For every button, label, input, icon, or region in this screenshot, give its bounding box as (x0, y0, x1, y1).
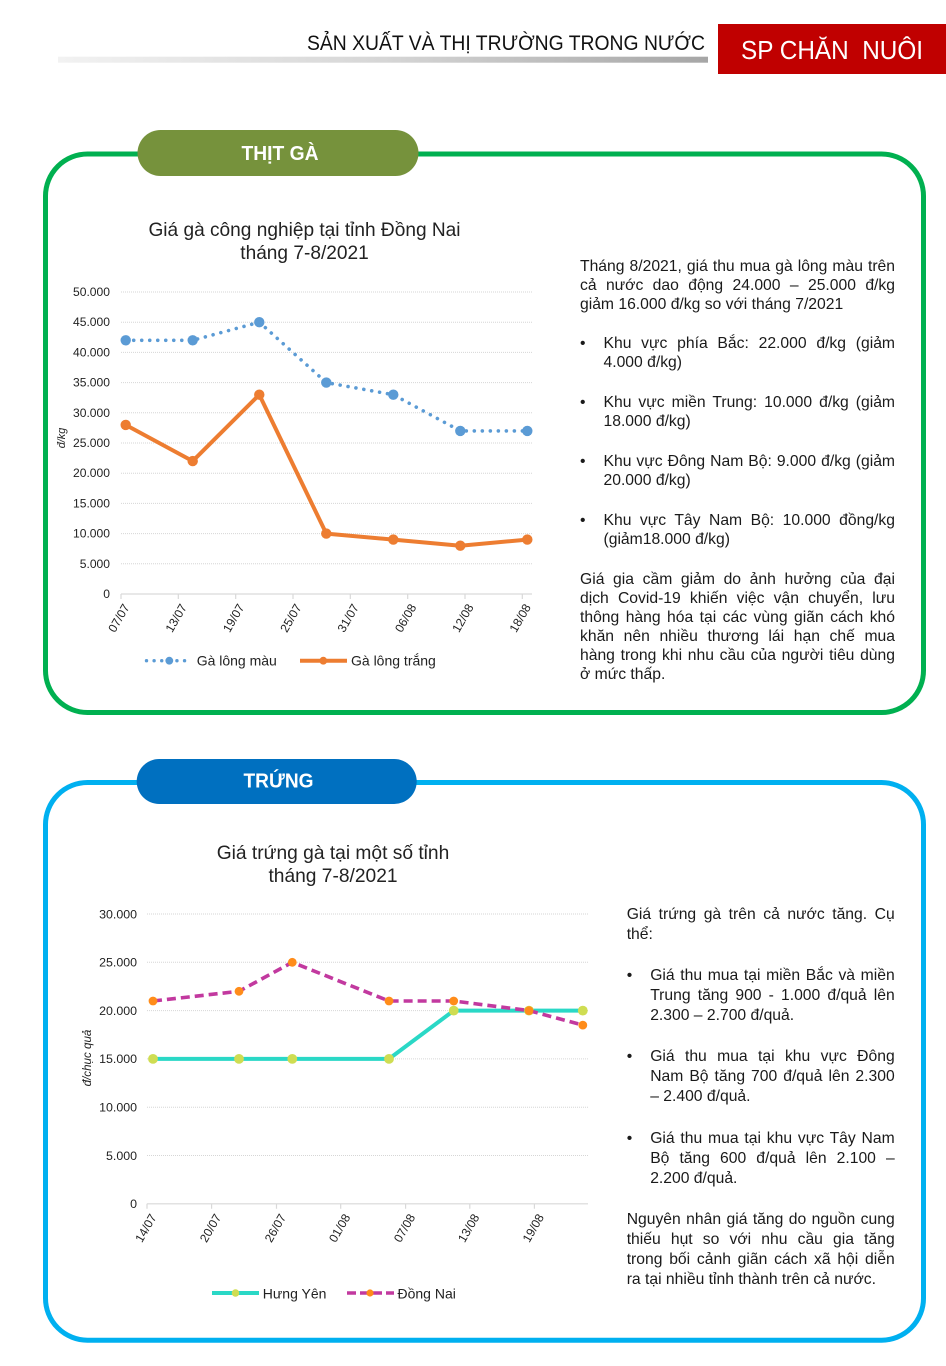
bullet: north: Khu vực phía Bắc: 22.000 đ/kg (giảm (604, 335, 895, 352)
x axis labels: 19/08 (520, 1211, 547, 1245)
paragraph: intro (580, 258, 895, 313)
header section tag: SP CHĂN NUÔI (741, 35, 923, 65)
x axis labels: 01/08 (326, 1211, 353, 1245)
paragraph: intro: Giá trứng gà trên cả nước tăng. Cụ (627, 906, 895, 923)
bullet: north and central: 2.300 – 2.700 đ/quả. (650, 1007, 794, 1024)
series: Hưng Yên (148, 1006, 588, 1064)
bullet: southwest: • (580, 512, 586, 529)
bullet: southwest: 2.200 đ/quả. (650, 1170, 737, 1187)
legend: Gà lông trắng (351, 652, 436, 668)
y axis labels: 0 (130, 1197, 137, 1211)
heading: eggs: TRỨNG (244, 768, 314, 792)
y axis labels: 45.000 (73, 315, 110, 329)
x axis labels: 07/07 (105, 601, 133, 635)
chart title: chicken price: tháng 7-8/2021 (240, 243, 369, 264)
x axis labels (105, 601, 534, 635)
bullet: central: Khu vực miền Trung: 10.000 đ/kg (giảm (604, 394, 895, 411)
paragraph: cause: thiếu hụt so với nhu cầu gia tăng (627, 1231, 895, 1248)
bullet: southwest: • (627, 1130, 632, 1146)
y axis labels: 5.000 (80, 557, 110, 571)
x axis labels: 25/07 (277, 601, 305, 635)
legend: Đồng Nai (398, 1286, 456, 1302)
bullet: north and central: • (627, 967, 632, 984)
paragraph: intro: giảm 16.000 đ/kg so với tháng 7/2021 (580, 296, 843, 313)
x axis labels: 06/08 (392, 601, 419, 635)
paragraph: cause: thông hàng hóa tại các vùng giãn cách khó (580, 609, 895, 626)
x axis labels: 31/07 (335, 601, 362, 635)
bullet: north and central: Trung tăng 900 - 1.000 đ/quả lên (650, 987, 895, 1004)
x axis labels: 12/08 (449, 601, 477, 635)
chart title: chicken price: Giá gà công nghiệp tại tỉnh Đồng Nai (148, 220, 461, 241)
bullet: north: 4.000 đ/kg) (604, 354, 682, 371)
header title: SẢN XUẤT VÀ THỊ TRƯỜNG TRONG NƯỚC (307, 32, 705, 55)
heading: eggs (137, 759, 417, 804)
bullet: southeast (580, 453, 895, 489)
bullet: southeast (627, 1048, 895, 1105)
x axis labels: 13/08 (455, 1211, 483, 1245)
x axis labels (132, 1211, 547, 1245)
y axis unit: đ/chục quả (81, 1029, 94, 1086)
y axis labels: 20.000 (99, 1004, 137, 1018)
x axis labels: 18/08 (507, 601, 534, 635)
y axis labels: 15.000 (99, 1052, 137, 1066)
legend: Gà lông màu (197, 652, 277, 668)
legend (212, 1286, 456, 1302)
chart title: chicken price (148, 220, 461, 264)
bullet: central: • (580, 394, 586, 411)
bullet: central: 18.000 đ/kg) (604, 413, 691, 430)
bullet: southwest (580, 512, 895, 548)
y axis labels (99, 907, 137, 1211)
text block: egg commentary (627, 906, 895, 1288)
text block: chicken meat commentary (580, 258, 895, 683)
y axis labels: 25.000 (73, 436, 110, 450)
bullet: north and central: Giá thu mua tại miền Bắc và miền (650, 967, 895, 984)
x axis labels: 20/07 (197, 1211, 224, 1245)
y axis labels: 40.000 (73, 345, 110, 359)
x axis labels: 19/07 (220, 601, 247, 635)
bullet: southwest: Bộ tăng 600 đ/quả lên 2.100 – (650, 1150, 895, 1167)
x axis labels: 13/07 (163, 601, 190, 635)
y axis labels: 30.000 (99, 907, 137, 921)
series: white chicken (120, 390, 532, 551)
y axis labels (73, 285, 110, 601)
chart title: egg price: Giá trứng gà tại một số tỉnh (217, 843, 449, 864)
paragraph: cause (580, 571, 895, 683)
paragraph: cause: Giá gia cầm giảm do ảnh hưởng của đại (580, 571, 895, 588)
legend: Hưng Yên (263, 1286, 326, 1302)
paragraph: cause: hàng trong khi nhu cầu của người tiêu dùng (580, 647, 895, 664)
y axis labels: 35.000 (73, 376, 110, 390)
heading: chicken meat (138, 130, 418, 176)
header title (58, 32, 708, 63)
panel: eggs frame (46, 782, 924, 1340)
header section tag (718, 24, 946, 74)
y axis labels: 30.000 (73, 406, 110, 420)
y axis labels: 5.000 (106, 1149, 137, 1163)
paragraph: cause: trong bối cảnh giãn cách xã hội diễn (627, 1251, 895, 1268)
y axis labels: 20.000 (73, 466, 110, 480)
heading: chicken meat: THỊT GÀ (242, 142, 318, 165)
paragraph: cause: ở mức thấp. (580, 666, 665, 683)
paragraph: intro: cả nước dao động 24.000 – 25.000 đ/kg (580, 277, 895, 294)
panel: chicken meat frame (46, 154, 924, 712)
paragraph: cause: ra tại nhiều tỉnh thành trên cả nước. (627, 1271, 876, 1288)
bullet: southwest: Khu vực Tây Nam Bộ: 10.000 đồng/kg (604, 512, 895, 529)
bullet: southeast: 20.000 đ/kg) (604, 472, 691, 489)
y axis labels: 25.000 (99, 956, 137, 970)
y axis labels: 10.000 (73, 527, 110, 541)
y axis labels: 50.000 (73, 285, 110, 299)
bullet: southeast: – 2.400 đ/quả. (650, 1088, 751, 1105)
y axis unit: đ/kg (56, 428, 68, 448)
bullet: southeast: • (580, 453, 586, 470)
y axis labels: 10.000 (99, 1100, 137, 1114)
x axis labels: 14/07 (132, 1211, 160, 1245)
chart title: egg price: tháng 7-8/2021 (268, 866, 398, 887)
paragraph: cause: khăn nên nhiều thương lái hạn chế mua (580, 628, 895, 645)
paragraph: intro (627, 906, 895, 943)
line chart: chicken price (56, 285, 534, 668)
bullet: southeast: Nam Bộ tăng 700 đ/quả lên 2.300 (650, 1068, 895, 1085)
x axis labels: 07/08 (391, 1211, 418, 1245)
bullet: north (580, 334, 895, 371)
bullet: southeast: Khu vực Đông Nam Bộ: 9.000 đ/kg (giảm (604, 453, 895, 470)
y axis labels: 15.000 (73, 496, 110, 510)
paragraph: intro: thể: (627, 926, 653, 943)
bullet: north: • (580, 335, 586, 352)
paragraph: cause: dịch Covid-19 khiến việc vận chuyển, lưu (580, 590, 895, 607)
paragraph: cause: Nguyên nhân giá tăng do nguồn cung (627, 1210, 895, 1228)
y axis labels: 0 (103, 587, 110, 601)
series: coloured chicken (120, 317, 532, 436)
bullet: north and central (627, 966, 895, 1024)
paragraph: cause (627, 1210, 895, 1288)
chart title: egg price (217, 843, 449, 887)
legend (146, 652, 436, 668)
paragraph: intro: Tháng 8/2021, giá thu mua gà lông màu trên (580, 258, 895, 275)
bullet: southwest: (giảm18.000 đ/kg) (604, 531, 730, 548)
line chart: egg price (81, 907, 588, 1302)
bullet: southeast: Giá thu mua tại khu vực Đông (650, 1048, 895, 1065)
bullet: central (580, 394, 895, 430)
bullet: southwest: Giá thu mua tại khu vực Tây Nam (650, 1130, 895, 1146)
bullet: southwest (627, 1130, 895, 1187)
series: Đồng Nai (149, 958, 587, 1030)
bullet: southeast: • (627, 1048, 632, 1065)
x axis labels: 26/07 (262, 1211, 289, 1245)
